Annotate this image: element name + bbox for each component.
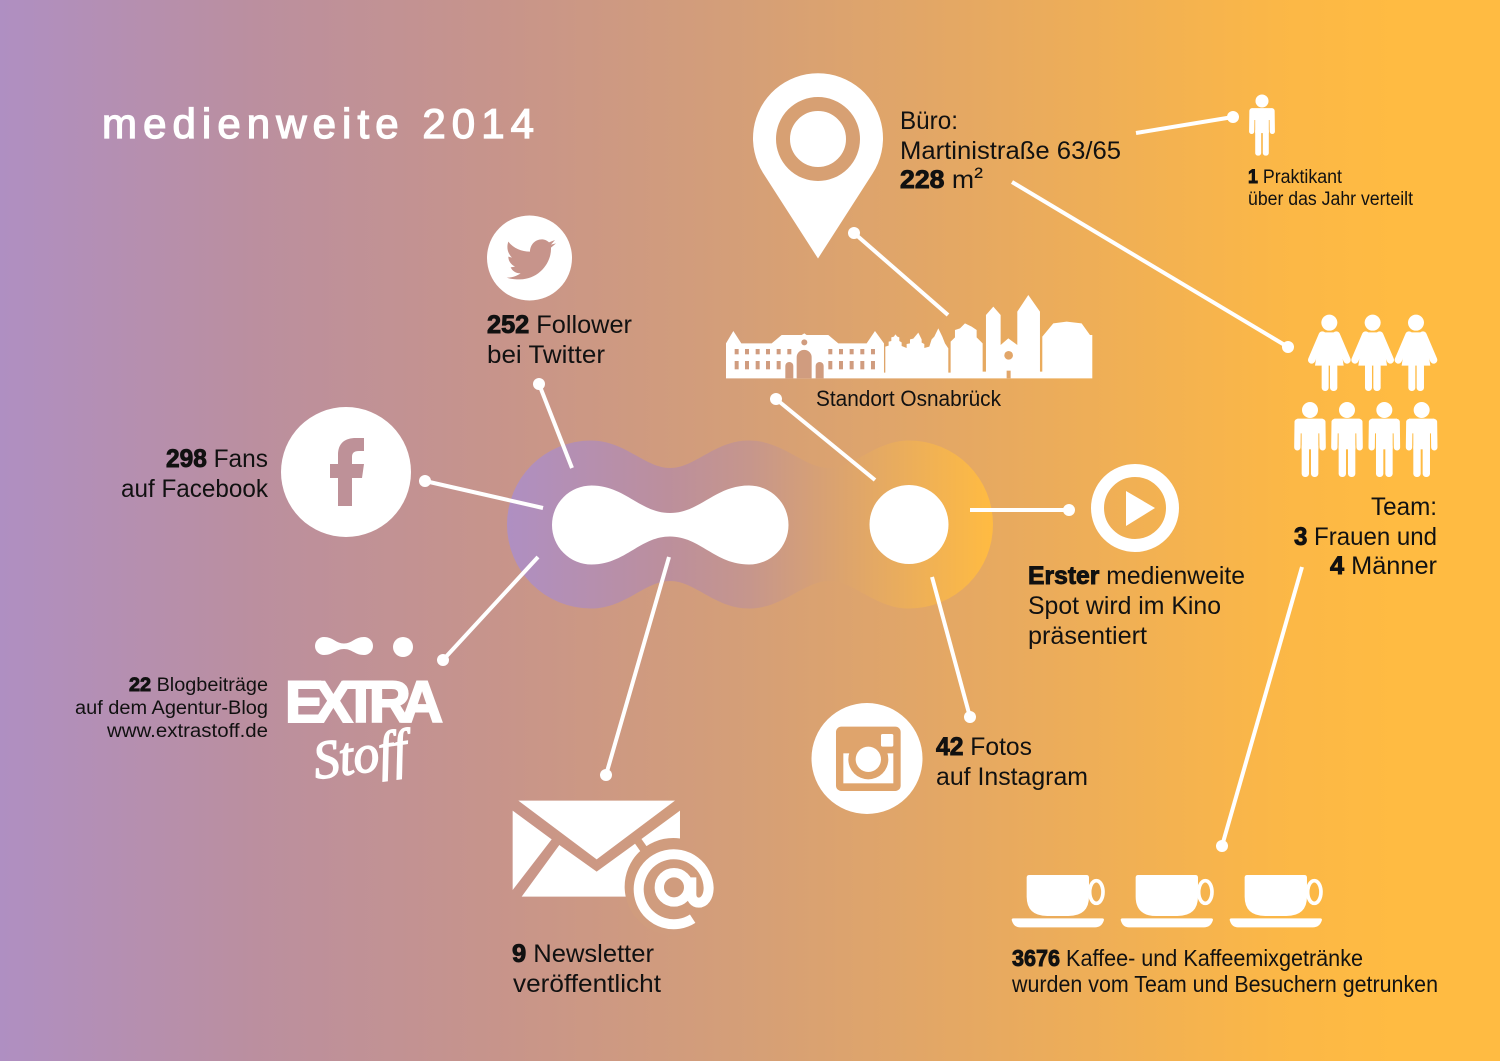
text: blog: www.extrastoff.de (106, 721, 268, 742)
text: team (1294, 493, 1437, 580)
text: instagram (936, 733, 1088, 791)
logo: Extra Stoff: EXTRA (285, 670, 443, 735)
icon: facebook (281, 407, 411, 537)
text: intern: 1 Praktikant (1248, 167, 1343, 188)
icon: play button (1098, 470, 1172, 546)
white dot (870, 485, 948, 564)
text: facebook: auf Facebook (121, 475, 268, 503)
text: office (900, 107, 1121, 194)
text: office: ² (974, 163, 983, 191)
text: facebook (121, 445, 268, 503)
text: team: 3 Frauen und (1294, 523, 1437, 551)
icon: newsletter envelope (513, 801, 722, 935)
text: blog: 22 Blogbeiträge (129, 675, 268, 696)
text: intern (1248, 167, 1414, 210)
icon: twitter (487, 216, 572, 300)
icon: team people (1296, 315, 1436, 477)
title: medienweite 2014 (102, 100, 534, 147)
text: coffee: wurden vom Team und Besuchern getrunken (1011, 971, 1438, 997)
text: office: 228 m (900, 166, 972, 194)
text: newsletter: 9 Newsletter (512, 940, 654, 968)
text: cinema spot: Spot wird im Kino (1028, 592, 1221, 620)
text: cinema spot: Erster medienweite (1028, 562, 1245, 590)
text: team: Team: (1371, 493, 1437, 521)
logo: Extra Stoff: Stoff (309, 717, 417, 791)
text: twitter (487, 311, 632, 369)
logo: Extra Stoff (285, 637, 443, 791)
text: office: Martinistraße 63/65 (900, 137, 1121, 165)
text: office: Büro: (900, 107, 958, 135)
text: team: 4 Männer (1330, 552, 1437, 580)
outer gradient blob (507, 440, 993, 608)
text: instagram: auf Instagram (936, 763, 1088, 791)
white infinity shape (552, 486, 789, 564)
icon: coffee cups (1012, 875, 1322, 927)
text: coffee (1011, 945, 1438, 997)
text: instagram: 42 Fotos (936, 733, 1032, 761)
text: twitter: 252 Follower (487, 311, 632, 339)
text: twitter: bei Twitter (487, 341, 605, 369)
text: cinema spot: präsentiert (1028, 622, 1147, 650)
icon: instagram (812, 703, 922, 814)
icon: intern person (1251, 94, 1273, 156)
icon: location pin (753, 73, 883, 258)
text: blog: auf dem Agentur-Blog (75, 698, 268, 719)
icon: Osnabrück skyline (726, 295, 1092, 378)
text: intern: über das Jahr verteilt (1248, 189, 1414, 210)
text: blog (75, 675, 268, 742)
text: newsletter (512, 940, 661, 998)
text: facebook: 298 Fans (166, 445, 268, 473)
connector lines (419, 111, 1302, 852)
text: coffee: 3676 Kaffee- und Kaffeemixgetränke (1012, 945, 1363, 971)
central blob graphic (507, 440, 993, 608)
text: cinema spot (1028, 562, 1245, 650)
text: newsletter: veröffentlicht (513, 970, 661, 998)
text: Standort Osnabrück: Standort Osnabrück (816, 386, 1002, 411)
